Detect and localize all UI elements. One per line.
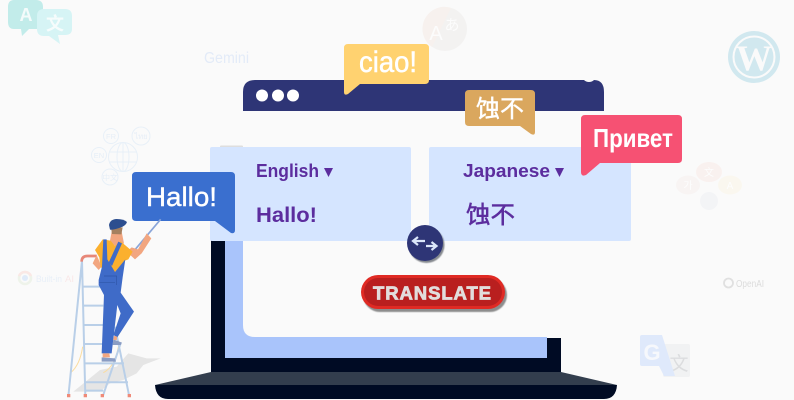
icon: faint circular translation badge: A xyxy=(429,23,443,45)
panel: source language xyxy=(210,146,411,241)
speech bubble: ciao xyxy=(344,44,429,95)
icon: faint translate speech bubbles top left: A xyxy=(20,5,32,25)
icon: faint group of multilingual bubbles: 가 xyxy=(683,180,693,192)
speech bubble: Privet xyxy=(581,115,682,176)
ladder rope xyxy=(71,347,118,373)
logo: WordPress faint xyxy=(728,31,780,83)
pole xyxy=(133,219,161,252)
icon: faint translate speech bubbles top left xyxy=(8,0,72,44)
logo: WordPress faint: W xyxy=(736,38,772,78)
speech bubble: ciao: ciao! xyxy=(359,46,417,79)
shoes xyxy=(102,339,122,362)
laptop screen bezel xyxy=(211,240,561,372)
button: swap languages xyxy=(407,225,444,263)
icon: faint globe with language circles: 中文 xyxy=(102,172,118,182)
icon: faint globe with language circles xyxy=(92,127,150,185)
icon: faint translate speech bubbles top left: 文 xyxy=(46,13,64,34)
icon: faint Google Translate: 文 xyxy=(669,353,689,375)
button: translate xyxy=(361,275,507,312)
neck xyxy=(110,232,124,246)
icon: faint Google Translate xyxy=(640,335,690,377)
illustration: worker on ladder xyxy=(67,219,161,397)
icon: faint globe with language circles: EN xyxy=(94,151,104,160)
icon: faint group of multilingual bubbles: A xyxy=(727,181,734,192)
speech bubble: Hallo xyxy=(132,172,235,233)
browser title bar xyxy=(243,80,604,111)
laptop screen inner frame xyxy=(225,240,547,358)
ladder handle xyxy=(82,256,97,262)
laptop xyxy=(155,240,617,399)
overalls xyxy=(99,239,134,353)
speech bubble: Hallo: Hallo! xyxy=(146,182,217,212)
overalls pocket xyxy=(99,276,117,285)
hair xyxy=(111,227,123,234)
shirt xyxy=(95,239,133,272)
front arm xyxy=(127,233,151,259)
speech bubble: Privet: Привет xyxy=(593,123,673,153)
laptop deck xyxy=(155,372,617,385)
icon: faint Google Translate: G xyxy=(643,340,661,365)
speech bubble: Japanese brown: 蚀不 xyxy=(476,96,524,123)
logo: Built-in AI faint xyxy=(19,272,74,285)
icon: faint globe with language circles: FR xyxy=(106,132,117,141)
cap xyxy=(109,219,127,230)
dropdown arrow xyxy=(324,168,333,177)
logo: OpenAI faint: OpenAI xyxy=(736,279,764,290)
floor shadow xyxy=(73,353,161,392)
button: translate: TRANSLATE xyxy=(373,282,491,304)
icon: faint circular translation badge: あ xyxy=(444,17,460,34)
logo: Built-in AI faint: Built-in xyxy=(36,274,62,285)
icon: faint circular translation badge xyxy=(422,7,467,51)
ladder feet xyxy=(67,394,131,397)
ladder xyxy=(68,261,129,397)
logo: OpenAI faint xyxy=(724,278,764,290)
laptop base xyxy=(155,385,617,399)
panel: target language xyxy=(429,147,631,241)
overalls right strap xyxy=(109,242,122,266)
icon: faint group of multilingual bubbles xyxy=(676,162,742,210)
translated text: 蚀不 xyxy=(466,202,515,229)
ankle xyxy=(103,336,117,357)
dropdown arrow xyxy=(555,168,564,177)
logo: Built-in AI faint: AI xyxy=(65,274,74,285)
back arm xyxy=(93,255,102,270)
speech bubble: Japanese brown xyxy=(465,90,535,135)
icon: faint globe with language circles: ไทย xyxy=(133,132,148,141)
source text: Hallo! xyxy=(256,204,317,227)
icon: faint group of multilingual bubbles: 文 xyxy=(704,166,714,179)
target language label: Japanese xyxy=(463,161,550,181)
logo: Gemini faint: Gemini xyxy=(204,50,249,67)
source language label: English xyxy=(256,161,319,181)
